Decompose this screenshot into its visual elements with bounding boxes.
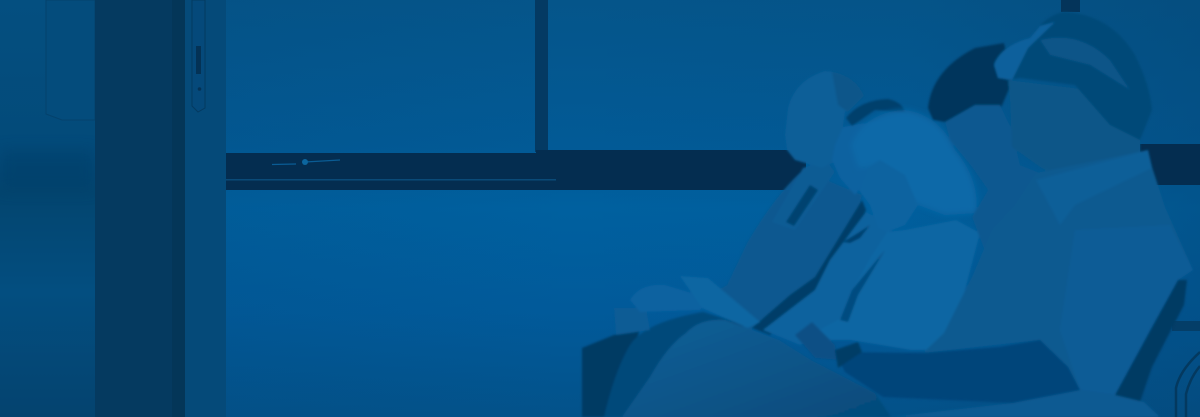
people group (582, 12, 1193, 417)
person: front man's arm, watch and leg (622, 320, 1080, 417)
person: young man (928, 43, 1052, 270)
paper held by seated patients (680, 276, 760, 328)
chair and rail at right edge (1172, 321, 1200, 417)
person: older woman with curly hair (800, 110, 980, 350)
person: elderly man (582, 71, 866, 417)
left wall (0, 0, 95, 417)
door frame with lock plate (185, 0, 226, 417)
dark door column (95, 0, 185, 417)
person: woman behind (763, 99, 905, 345)
window frame bars (226, 0, 1200, 190)
person: man in front in short-sleeve shirt (890, 12, 1193, 417)
